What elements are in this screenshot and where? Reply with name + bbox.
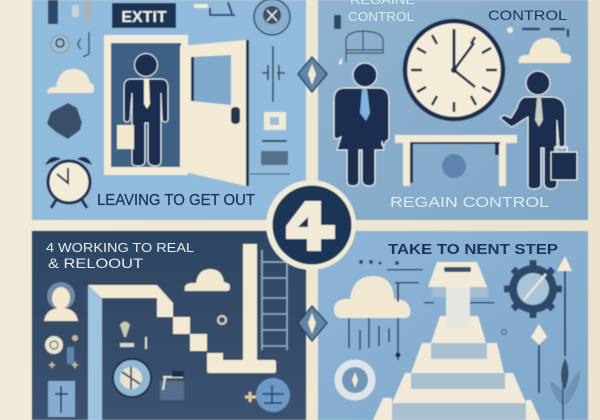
ladder [262,250,287,350]
icon: cloud [185,269,230,291]
stair structure [88,244,276,420]
heading: working to real: 4 WORKING TO REAL [46,241,194,255]
icon: globe under table [442,154,466,178]
man figure with briefcase [500,71,577,189]
small icons [334,15,568,64]
exit sign [112,3,176,28]
large clock [405,21,503,119]
heading: leaving to get out: LEAVING TO GET OUT [97,192,255,209]
icons right middle [250,46,290,174]
icon: woman avatar [44,282,78,321]
arrow: upward short [531,324,547,393]
small marks [359,260,506,334]
heading: relout: & RELOOUT [48,255,144,271]
heading: take next step: TAKE TO NENT STEP [388,242,558,258]
exit sign: EXTIT [121,9,167,26]
icon: cloud with rain [334,276,410,360]
panel: regain control [318,0,588,220]
center number badge [266,180,356,270]
door frame [104,35,188,175]
arrow: upward tall [557,256,572,356]
stepped pyramid [373,262,540,420]
icon: leaf plant [550,358,580,420]
icon: diamond connector lower [298,306,327,341]
heading: control right: CONTROL [488,7,567,23]
open door [180,40,249,186]
woman figure [334,63,389,186]
person leaving [117,54,168,166]
icon: diamond connector upper [298,57,327,92]
table [395,135,517,186]
heading: regaine control left: CONTROL [348,10,414,24]
icon: compass gear [336,361,374,399]
panel: take next step [318,231,588,420]
icon: large gear [504,260,562,318]
heading: regain control bottom: REGAIN CONTROL [390,195,549,211]
panel: working to real [32,231,306,420]
icons right top [194,0,290,35]
small icons top left [48,0,92,57]
panel: leaving to get out [32,0,306,220]
icon: alarm clock [45,157,92,208]
inner icons [45,316,290,417]
icon: cloud [519,38,571,63]
icon: cloud [47,69,94,93]
icon: gear [47,103,82,139]
